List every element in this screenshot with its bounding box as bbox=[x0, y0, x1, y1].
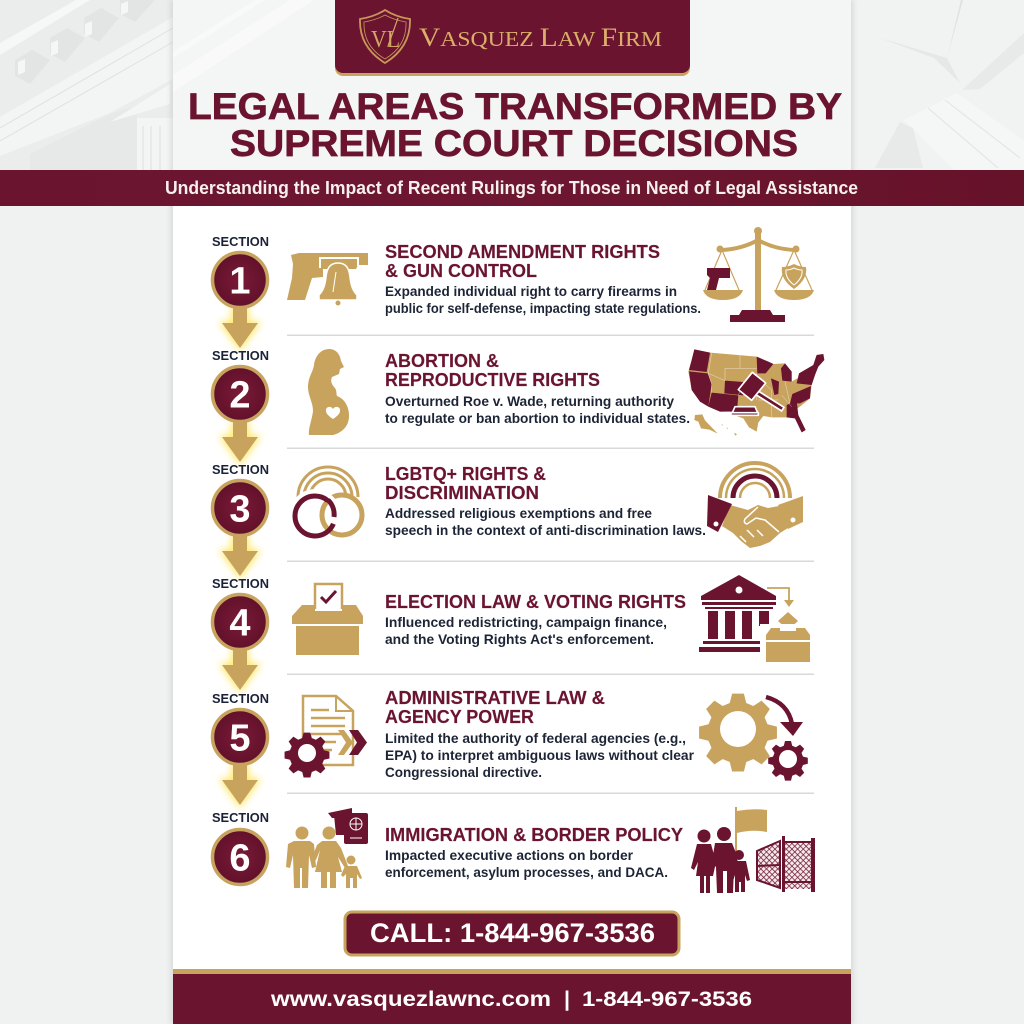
heading: LGBTQ: LGBTQ+ RIGHTS & bbox=[385, 463, 546, 484]
icon: pregnant woman silhouette bbox=[308, 349, 349, 435]
body: LGBTQ bbox=[385, 505, 706, 538]
body: election bbox=[385, 614, 667, 647]
section 6 bbox=[212, 807, 815, 893]
body: abortion: Overturned Roe v. Wade, returning authority bbox=[385, 393, 674, 409]
footer bar bbox=[173, 969, 851, 1024]
section 2 badge and arrow: 2 bbox=[229, 374, 251, 416]
section 2 bbox=[212, 349, 824, 462]
body: immigration bbox=[385, 847, 668, 880]
footer bar: 1-844-967-3536 bbox=[582, 987, 752, 1011]
section 3 bbox=[212, 463, 803, 576]
section 1 badge and arrow bbox=[212, 235, 269, 348]
heading: administrative: ADMINISTRATIVE LAW & bbox=[385, 687, 605, 708]
body: administrative: Congressional directive. bbox=[385, 764, 542, 780]
body: abortion bbox=[385, 393, 690, 426]
icon: gears and curved arrow bbox=[699, 694, 808, 781]
section 3 badge and arrow: 3 bbox=[229, 488, 251, 530]
section 4 badge and arrow: 4 bbox=[229, 602, 251, 644]
icon: VL shield: VL bbox=[371, 27, 400, 53]
body: administrative: EPA) to interpret ambiguous laws without clear bbox=[385, 747, 695, 763]
section 1 bbox=[212, 227, 814, 348]
icon: scales with gun and shield bbox=[703, 227, 814, 322]
body: administrative: Limited the authority of federal agencies (e.g., bbox=[385, 730, 686, 746]
section 4 badge and arrow bbox=[212, 577, 269, 690]
heading: abortion: ABORTION & bbox=[385, 350, 499, 371]
central white panel bbox=[170, 0, 854, 1024]
section 2: REPRODUCTIVE RIGHTS bbox=[385, 369, 600, 390]
icon: VL shield bbox=[360, 10, 410, 63]
section 6 badge: SECTION bbox=[212, 811, 269, 825]
body: immigration: enforcement, asylum processes, and DACA. bbox=[385, 864, 668, 880]
section 6 badge: 6 bbox=[229, 838, 251, 880]
section 3 badge and arrow: SECTION bbox=[212, 463, 269, 477]
icon: rainbow and interlocked rings bbox=[294, 467, 362, 536]
body: administrative bbox=[385, 730, 695, 780]
section 2 badge and arrow bbox=[212, 349, 269, 462]
background: courthouse architecture right bbox=[851, 0, 1024, 170]
body: LGBTQ: speech in the context of anti-discrimination laws. bbox=[385, 522, 706, 538]
section 5 badge and arrow bbox=[212, 692, 269, 805]
call to action button: CALL: 1-844-967-3536 bbox=[370, 918, 655, 948]
body: second amendment: public for self-defense, impacting state regulations. bbox=[385, 300, 701, 316]
section 6 badge bbox=[212, 811, 269, 884]
icon: courthouse and ballot box bbox=[699, 575, 810, 663]
section 1 badge and arrow: SECTION bbox=[212, 235, 269, 249]
heading: immigration: IMMIGRATION & BORDER POLICY bbox=[385, 824, 684, 845]
icon: rainbow and handshake bbox=[707, 463, 803, 548]
subtitle band bbox=[0, 170, 1024, 206]
section 5: AGENCY POWER bbox=[385, 706, 534, 727]
footer bar: www.vasquezlawnc.com bbox=[270, 987, 551, 1011]
section 1: & GUN CONTROL bbox=[385, 260, 537, 281]
body: second amendment: Expanded individual right to carry firearms in bbox=[385, 283, 677, 299]
heading: second amendment: SECOND AMENDMENT RIGHTS bbox=[385, 241, 660, 262]
body: immigration: Impacted executive actions on border bbox=[385, 847, 634, 863]
section 4 bbox=[212, 575, 810, 690]
icon: ballot box with check bbox=[292, 584, 363, 655]
call to action button bbox=[345, 912, 679, 955]
icon: pistol with liberty bell bbox=[287, 253, 368, 306]
title: LEGAL AREAS TRANSFORMED BY bbox=[188, 86, 842, 127]
icon: US map with gavel bbox=[688, 349, 824, 436]
dividers bbox=[287, 334, 814, 794]
body: abortion: to regulate or ban abortion to individual states. bbox=[385, 410, 690, 426]
section 3: DISCRIMINATION bbox=[385, 482, 539, 503]
background: courthouse architecture left bbox=[0, 0, 173, 170]
section 4 badge and arrow: SECTION bbox=[212, 577, 269, 591]
icon: family, flag and border gate bbox=[691, 807, 815, 893]
title: SUPREME COURT DECISIONS bbox=[230, 123, 798, 164]
icon: family and passport bbox=[286, 808, 368, 888]
body: election: and the Voting Rights Act's enforcement. bbox=[385, 631, 654, 647]
body: second amendment bbox=[385, 283, 701, 316]
section 5 badge and arrow: SECTION bbox=[212, 692, 269, 706]
section 5 badge and arrow: 5 bbox=[229, 718, 251, 760]
body: LGBTQ: Addressed religious exemptions and free bbox=[385, 505, 652, 521]
icon: document, gear and chevrons bbox=[285, 696, 367, 777]
footer bar: | bbox=[564, 987, 570, 1011]
body: election: Influenced redistricting, campaign finance, bbox=[385, 614, 667, 630]
section 3 badge and arrow bbox=[212, 463, 269, 576]
subtitle band: Understanding the Impact of Recent Rulings for Those in Need of Legal Assistance bbox=[165, 177, 858, 198]
section 2 badge and arrow: SECTION bbox=[212, 349, 269, 363]
title bbox=[188, 86, 842, 164]
section 5 bbox=[212, 687, 808, 805]
header logo plaque bbox=[335, 0, 690, 76]
section 1 badge and arrow: 1 bbox=[229, 260, 251, 302]
firm name: VASQUEZ LAW FIRM bbox=[419, 23, 662, 52]
heading: election: ELECTION LAW & VOTING RIGHTS bbox=[385, 591, 686, 612]
